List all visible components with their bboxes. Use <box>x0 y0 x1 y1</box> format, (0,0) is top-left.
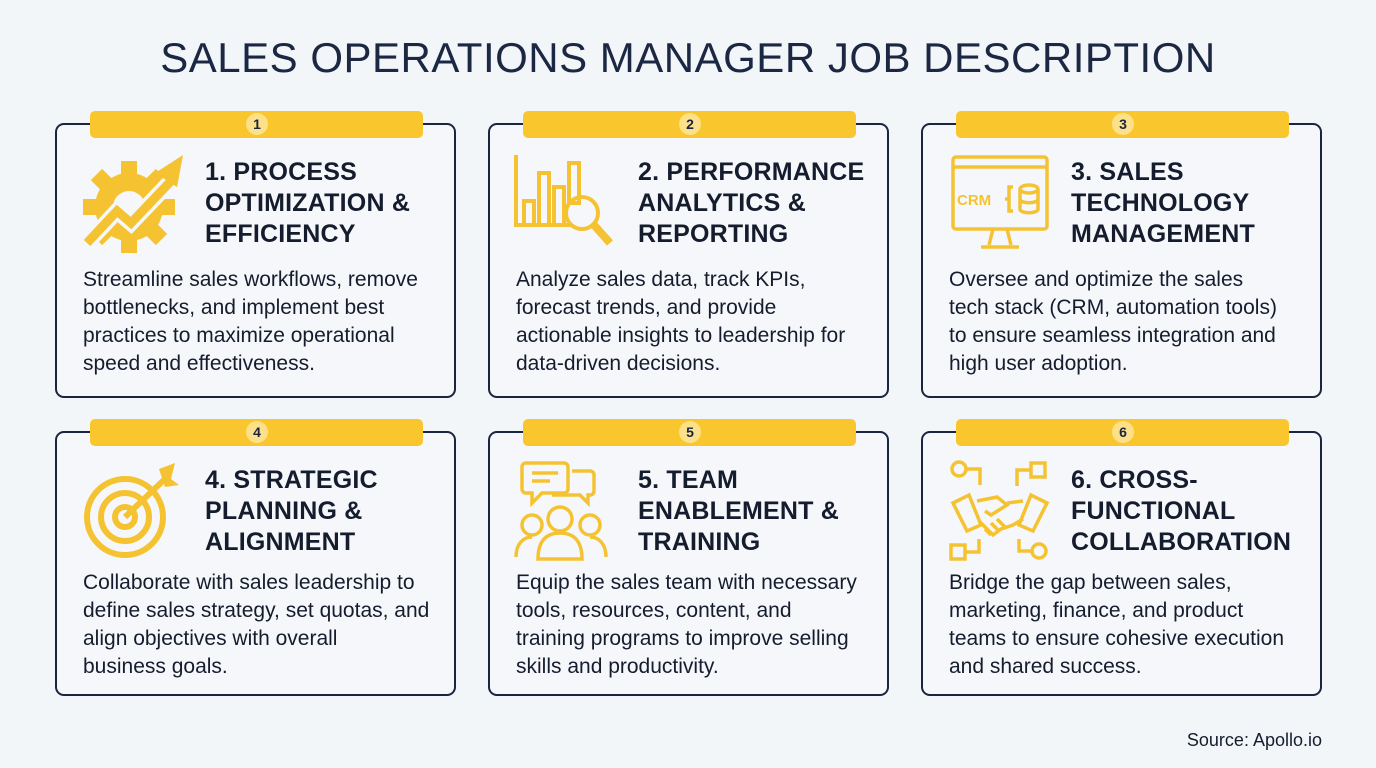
text <box>516 571 857 678</box>
heading: 4. STRATEGIC <box>205 466 378 494</box>
text: speed and effectiveness. <box>83 352 315 375</box>
heading <box>1071 158 1255 248</box>
heading <box>1071 466 1291 556</box>
heading: MANAGEMENT <box>1071 220 1255 248</box>
icon: gear with arrow <box>83 155 183 253</box>
heading <box>638 158 864 248</box>
heading <box>638 466 839 556</box>
text <box>949 571 1284 678</box>
heading: 6. CROSS- <box>1071 466 1198 494</box>
panel: sales technology: 3 <box>1119 116 1127 132</box>
text <box>83 268 418 375</box>
panel: team enablement <box>488 431 889 696</box>
heading: REPORTING <box>638 220 788 248</box>
text: Bridge the gap between sales, <box>949 571 1232 594</box>
panel: strategic planning <box>55 431 456 696</box>
text: Oversee and optimize the sales <box>949 268 1243 291</box>
text: Equip the sales team with necessary <box>516 571 857 594</box>
text: Collaborate with sales leadership to <box>83 571 415 594</box>
heading <box>205 158 410 248</box>
text: bottlenecks, and implement best <box>83 296 384 319</box>
text <box>83 571 429 678</box>
text: marketing, finance, and product <box>949 599 1243 622</box>
heading: PLANNING & <box>205 497 363 525</box>
text: and shared success. <box>949 655 1142 678</box>
heading: FUNCTIONAL <box>1071 497 1235 525</box>
text: align objectives with overall <box>83 627 337 650</box>
heading: 2. PERFORMANCE <box>638 158 864 186</box>
panel: cross-functional <box>921 431 1322 696</box>
text: data-driven decisions. <box>516 352 720 375</box>
heading: EFFICIENCY <box>205 220 356 248</box>
heading: TECHNOLOGY <box>1071 189 1249 217</box>
heading: TRAINING <box>638 528 760 556</box>
text: practices to maximize operational <box>83 324 395 347</box>
panel: performance analytics: 2 <box>686 116 694 132</box>
text: actionable insights to leadership for <box>516 324 845 347</box>
text: Streamline sales workflows, remove <box>83 268 418 291</box>
icon: target with arrow <box>84 463 179 558</box>
text: to ensure seamless integration and <box>949 324 1276 347</box>
panel: team enablement: 5 <box>686 424 694 440</box>
heading: ENABLEMENT & <box>638 497 839 525</box>
panel: strategic planning: 4 <box>253 424 261 440</box>
panel: sales technology <box>921 123 1322 398</box>
icon: handshake network <box>949 460 1050 561</box>
icon: team with chat bubbles <box>514 461 608 561</box>
text: training programs to improve selling <box>516 627 849 650</box>
icon: CRM monitor <box>951 155 1049 249</box>
source: Source: Apollo.io <box>1187 730 1322 750</box>
heading: 1. PROCESS <box>205 158 357 186</box>
text: define sales strategy, set quotas, and <box>83 599 429 622</box>
text: forecast trends, and provide <box>516 296 776 319</box>
text: Analyze sales data, track KPIs, <box>516 268 805 291</box>
heading: COLLABORATION <box>1071 528 1291 556</box>
panel: process optimization <box>55 123 456 398</box>
heading: ANALYTICS & <box>638 189 806 217</box>
text: skills and productivity. <box>516 655 719 678</box>
heading: ALIGNMENT <box>205 528 355 556</box>
text: teams to ensure cohesive execution <box>949 627 1284 650</box>
title: SALES OPERATIONS MANAGER JOB DESCRIPTION <box>160 34 1216 81</box>
icon: bar chart with magnifier <box>514 155 613 246</box>
heading: 3. SALES <box>1071 158 1184 186</box>
panel: cross-functional: 6 <box>1119 424 1127 440</box>
heading: 5. TEAM <box>638 466 738 494</box>
panel: performance analytics <box>488 123 889 398</box>
heading: OPTIMIZATION & <box>205 189 410 217</box>
panel: process optimization: 1 <box>253 116 261 132</box>
heading <box>205 466 378 556</box>
text: tools, resources, content, and <box>516 599 792 622</box>
text <box>516 268 845 375</box>
text: business goals. <box>83 655 228 678</box>
text: tech stack (CRM, automation tools) <box>949 296 1277 319</box>
icon: CRM monitor: CRM <box>957 192 991 209</box>
text: high user adoption. <box>949 352 1128 375</box>
text <box>949 268 1277 375</box>
